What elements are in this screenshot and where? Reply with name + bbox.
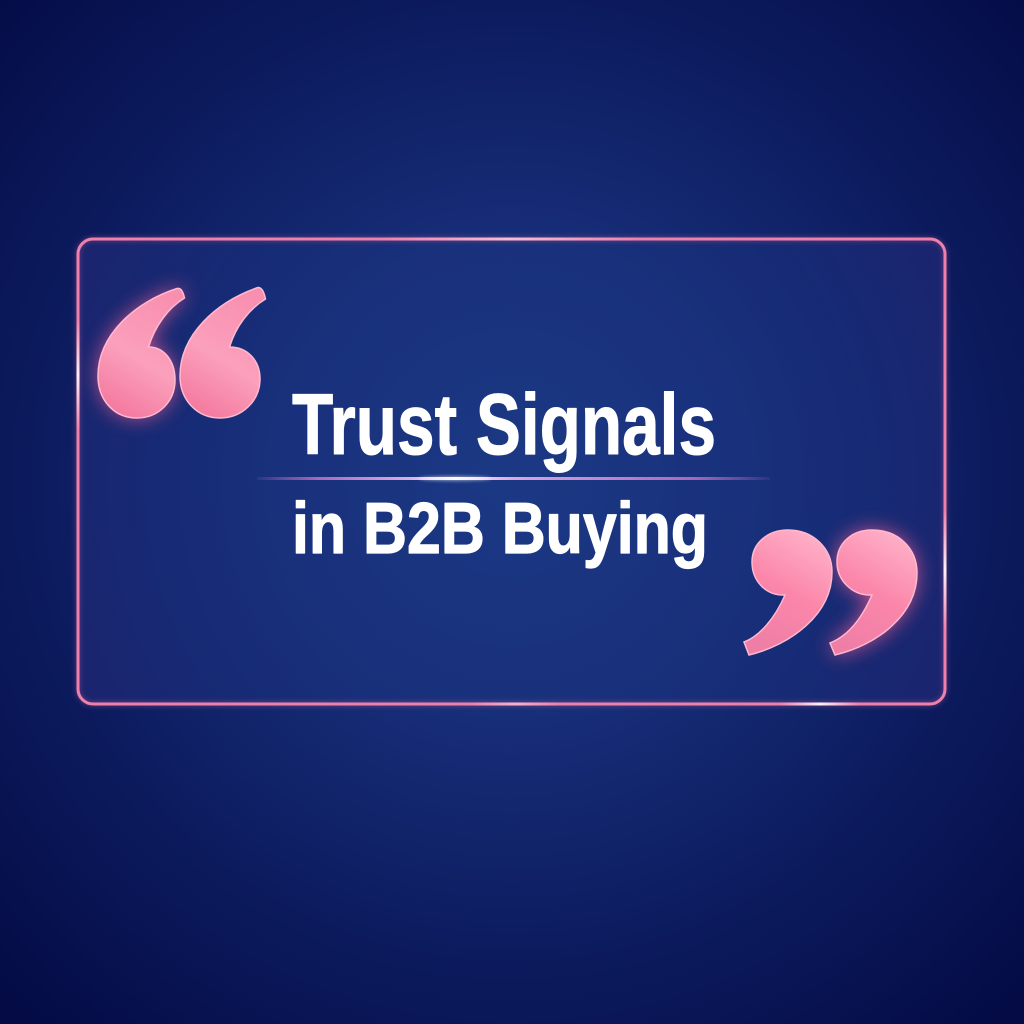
divider line [257, 476, 770, 481]
panel: rounded neon frame [76, 238, 946, 706]
title: second line: in B2B Buying [292, 489, 708, 569]
title: first line: Trust Signals [292, 377, 716, 473]
icon: opening quotation mark [98, 287, 266, 418]
icon: closing quotation mark [744, 530, 917, 655]
